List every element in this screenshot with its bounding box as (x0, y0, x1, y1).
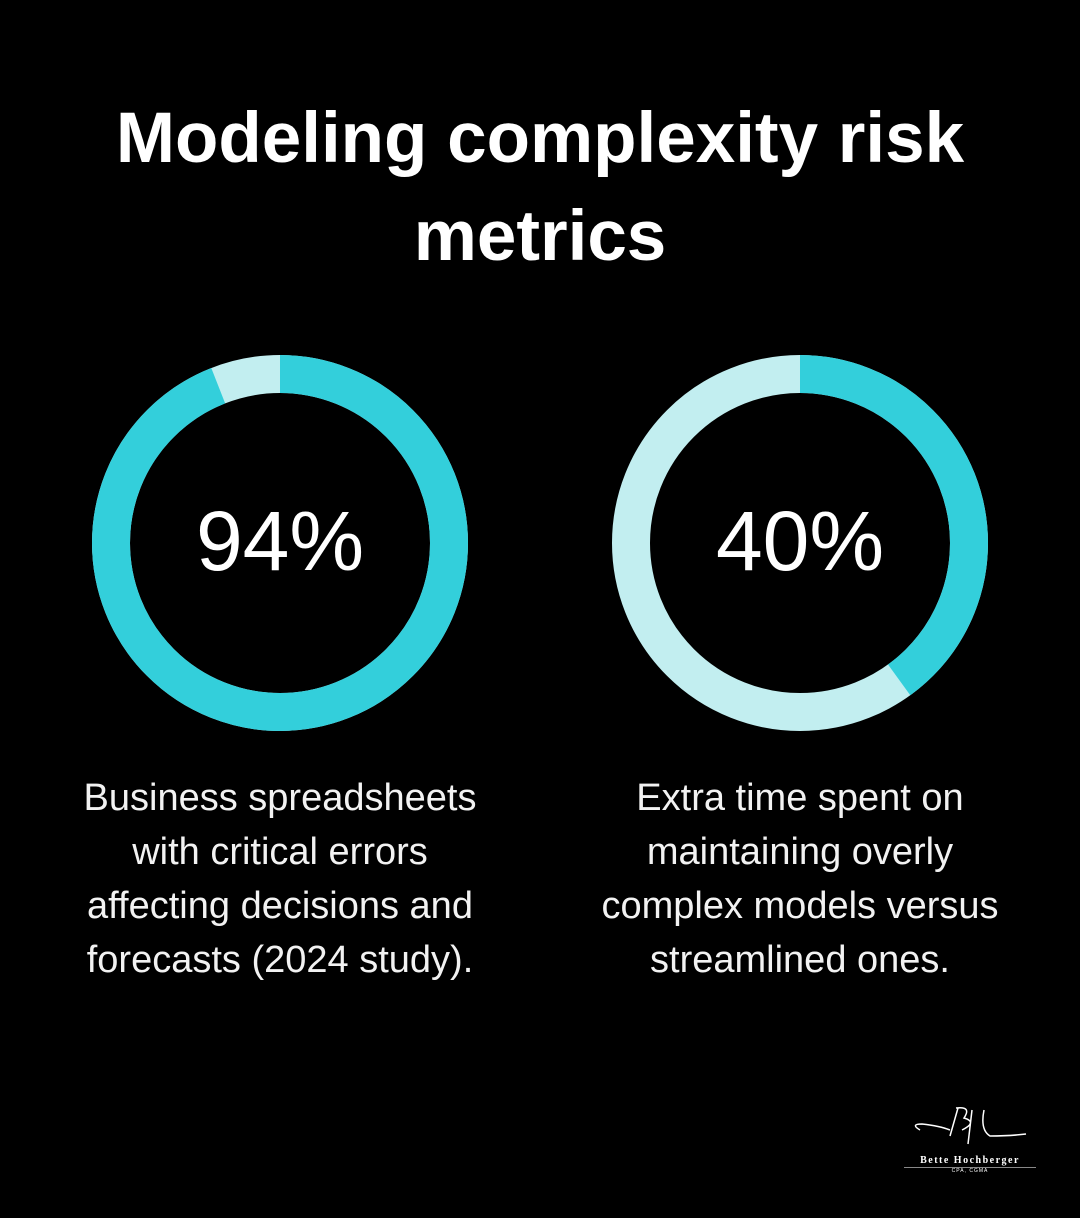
title: metrics (414, 197, 666, 276)
title: Modeling complexity risk (116, 99, 964, 178)
text: left description: Business spreadsheets (84, 777, 476, 819)
text: left description: affecting decisions and (87, 885, 473, 927)
text: right description: complex models versus (601, 885, 999, 927)
logo: CPA, CGMA (952, 1168, 988, 1174)
title (116, 99, 964, 276)
donut: 94%: 94% (196, 494, 364, 588)
logo: Bette Hochberger (920, 1155, 1020, 1166)
text: left description (84, 777, 476, 981)
text: right description: streamlined ones. (650, 939, 950, 981)
text: left description: with critical errors (132, 831, 428, 873)
logo (904, 1107, 1036, 1174)
donut: 40%: 40% (716, 494, 884, 588)
text: right description: Extra time spent on (636, 777, 964, 819)
text: left description: forecasts (2024 study). (87, 939, 473, 981)
text: right description (601, 777, 999, 981)
donut: 40% (631, 374, 969, 712)
text: right description: maintaining overly (647, 831, 953, 873)
donut: 94% (111, 374, 449, 712)
